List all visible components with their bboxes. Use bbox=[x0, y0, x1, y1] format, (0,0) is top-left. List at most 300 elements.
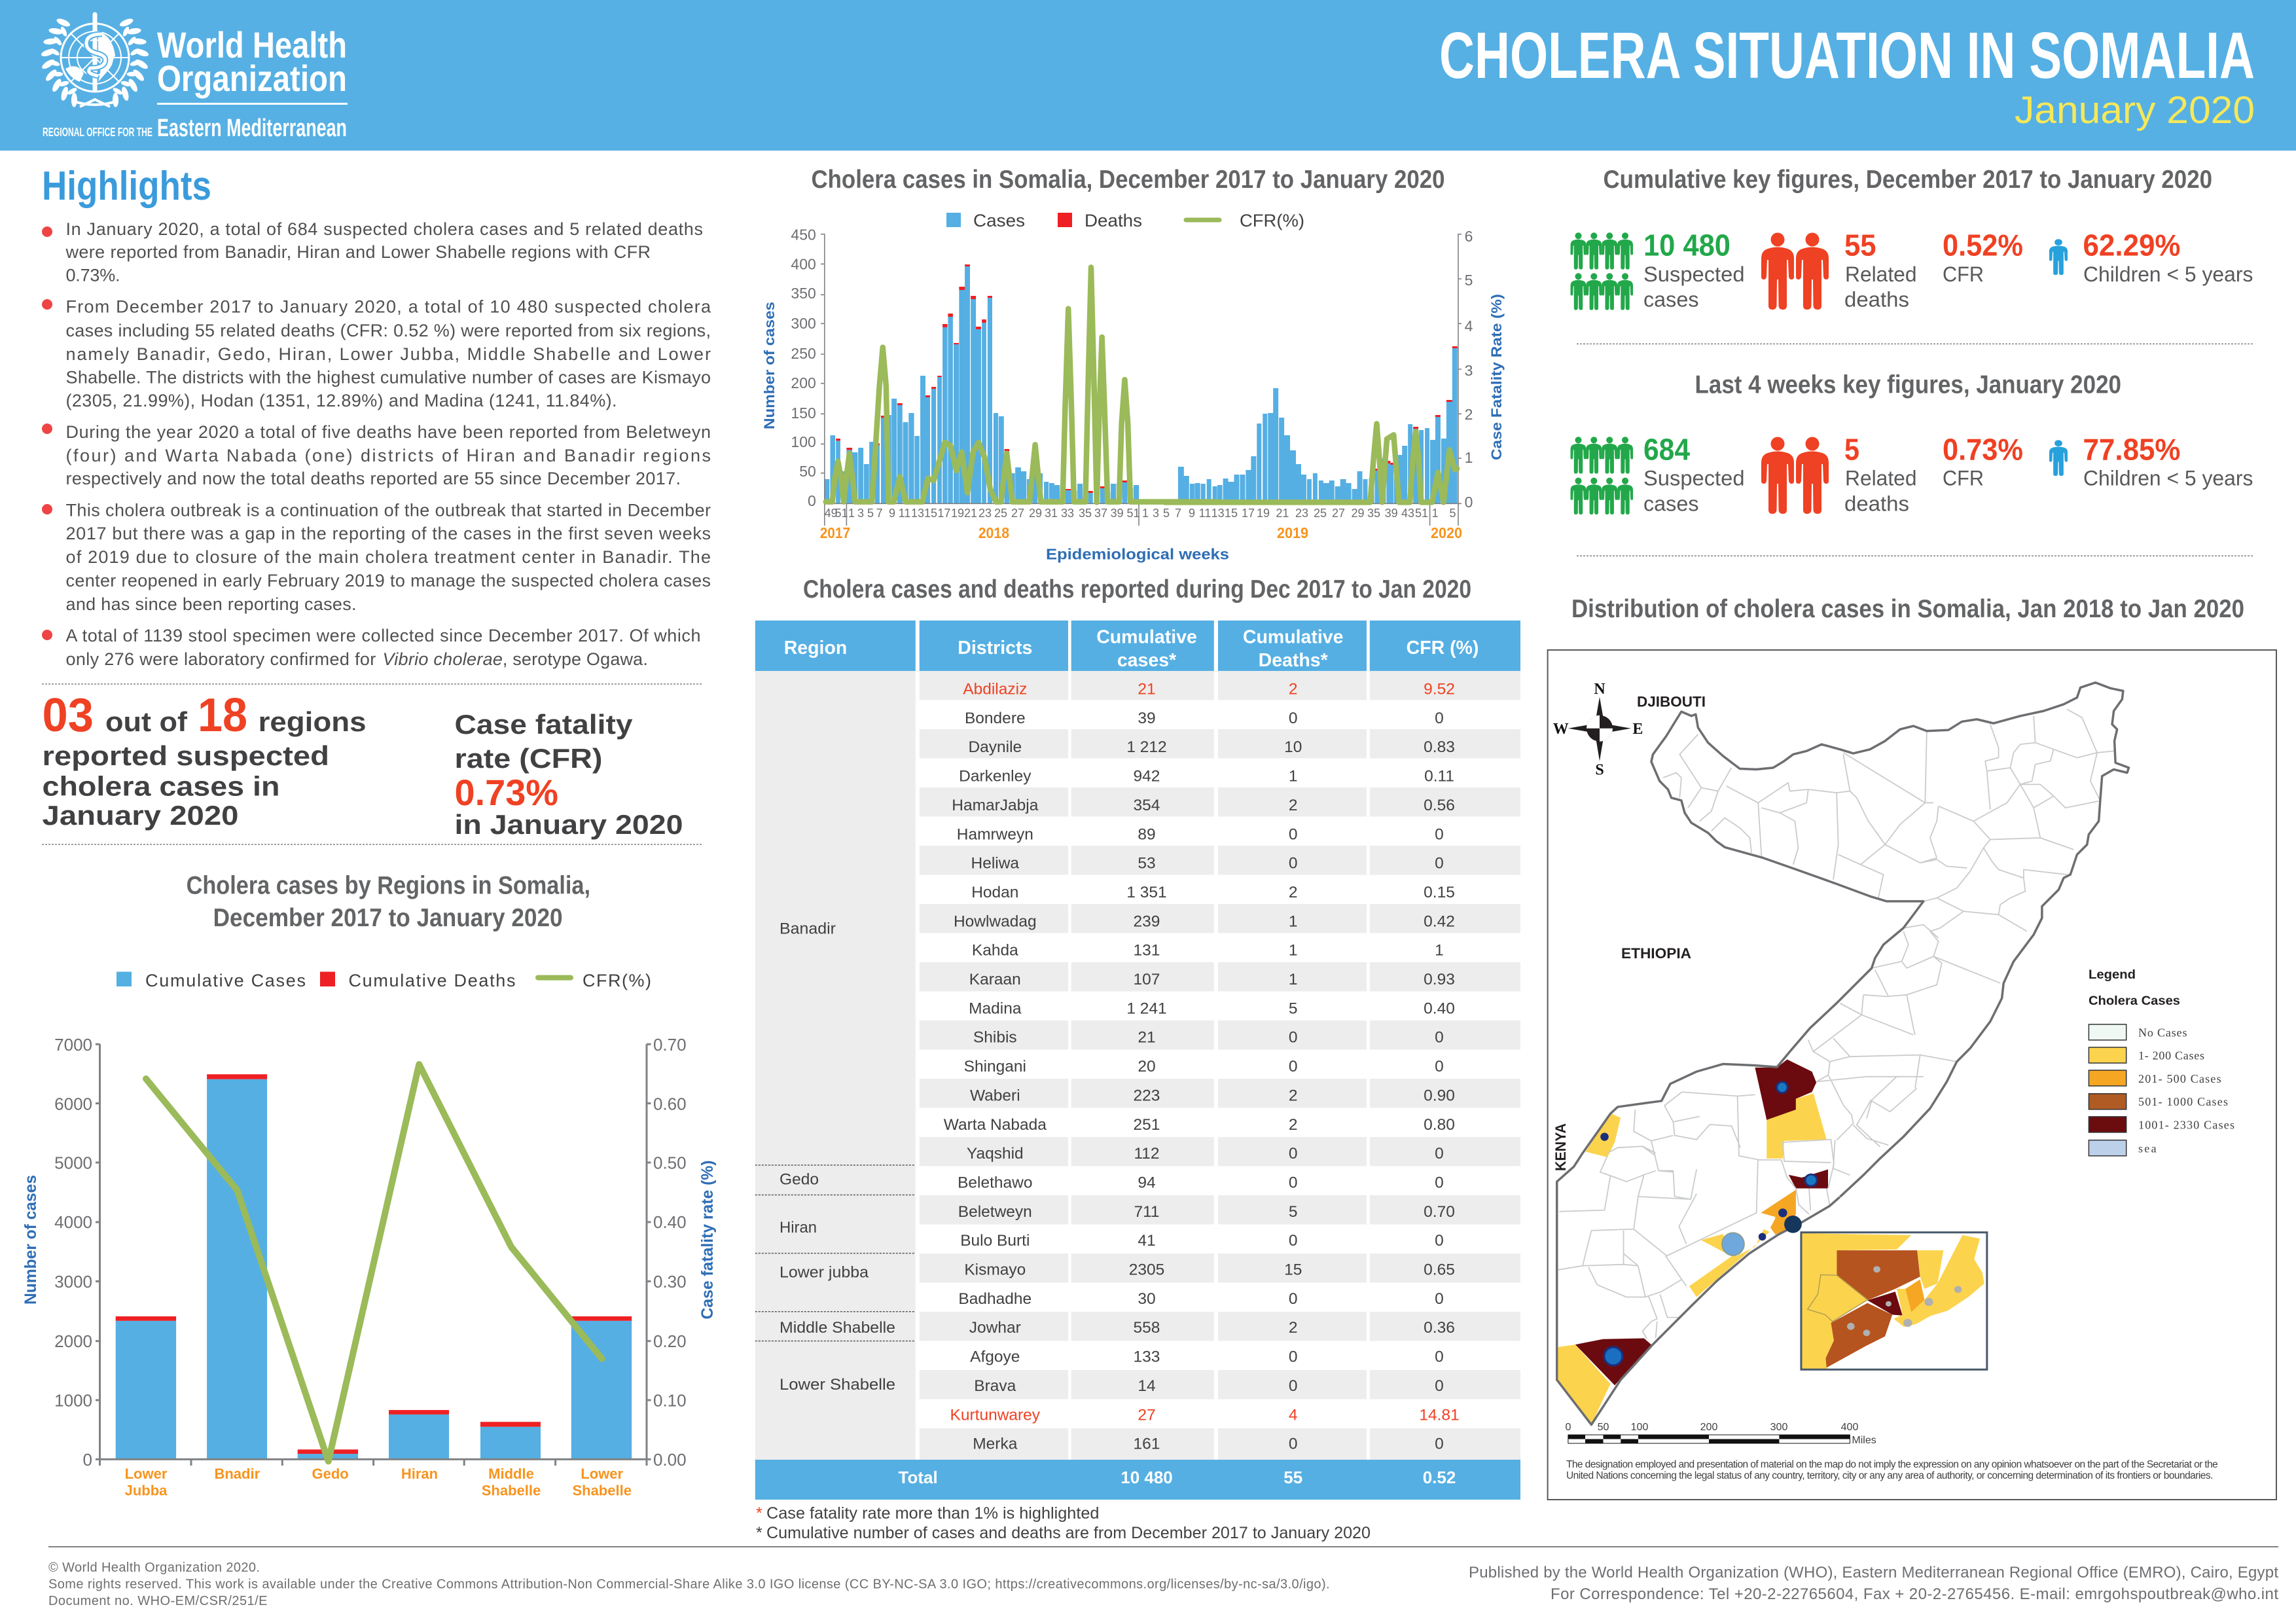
row: Kurtunwarey: 14.81 bbox=[1419, 1406, 1460, 1424]
callout: regions reporting: January 2020 bbox=[42, 800, 238, 831]
row: Badhadhe: Badhadhe bbox=[958, 1290, 1031, 1308]
row: Brava: Brava bbox=[974, 1377, 1016, 1395]
callout: case fatality rate: rate (CFR) bbox=[454, 743, 602, 774]
row: total: Total bbox=[899, 1468, 938, 1487]
footer: publisher bbox=[1469, 1564, 2278, 1603]
bullet 5: , serotype Ogawa. bbox=[503, 649, 648, 669]
week labels: 31 bbox=[1045, 507, 1058, 520]
axis title: case fatality rate: Case Fatality Rate (%) bbox=[1488, 294, 1505, 460]
row: Kismayo bbox=[964, 1261, 1455, 1279]
figure: suspected cases: cases bbox=[1643, 288, 1699, 312]
map legend: Cholera Cases bbox=[2089, 994, 2180, 1008]
line: weekly CFR bbox=[826, 267, 1457, 502]
row: Heliwa: 53 bbox=[1138, 855, 1156, 873]
row: Darkenley: 942 bbox=[1134, 768, 1160, 785]
WHO logo: REGIONAL OFFICE FOR THE bbox=[43, 126, 152, 139]
figure: related deaths: 5 bbox=[1844, 432, 1859, 466]
year labels: 2020 bbox=[1431, 524, 1462, 541]
row: Heliwa bbox=[971, 855, 1444, 873]
week labels: 27 bbox=[1011, 507, 1024, 520]
scale bar: 100 bbox=[1631, 1422, 1648, 1433]
row: Afgoye: 133 bbox=[1134, 1348, 1160, 1366]
figure: related deaths: deaths bbox=[1844, 492, 1909, 515]
axis title: epidemiological weeks: Epidemiological weeks bbox=[1046, 545, 1229, 562]
week labels: 39 bbox=[1385, 507, 1398, 520]
scale bar: 50 bbox=[1598, 1422, 1609, 1433]
map legend: 1001- 2330 Cases bbox=[2138, 1119, 2234, 1132]
row: Hamrweyn bbox=[957, 825, 1444, 843]
left axis labels bbox=[54, 1035, 92, 1470]
region labels: Shabelle bbox=[482, 1482, 541, 1498]
week labels: 51 bbox=[834, 507, 848, 520]
figure: suspected cases bbox=[1643, 432, 1745, 515]
scale bar: Miles bbox=[1852, 1435, 1876, 1446]
row: Abdilaziz: Abdilaziz bbox=[963, 681, 1027, 698]
map legend: 201- 500 Cases bbox=[2138, 1072, 2221, 1085]
table header: CFR (%) bbox=[1407, 638, 1479, 659]
row: Madina: 1 241 bbox=[1126, 1000, 1167, 1017]
right axis labels: 0.30 bbox=[653, 1272, 687, 1291]
right axis labels: 0.60 bbox=[653, 1094, 687, 1114]
chart legend: regions: Cumulative Deaths bbox=[348, 971, 516, 990]
bullet 5: A total of 1139 stool specimen were collected since December 2017. Of which bbox=[65, 626, 700, 645]
row: Shingani: 20 bbox=[1138, 1058, 1156, 1075]
figure: related deaths: Related bbox=[1845, 262, 1916, 286]
row: Hodan bbox=[971, 884, 1455, 901]
callout: regions reporting: 18 bbox=[198, 689, 247, 742]
row: Brava: 0 bbox=[1289, 1377, 1298, 1395]
figure: CFR: CFR bbox=[1943, 467, 1984, 490]
row: Badhadhe: 0 bbox=[1289, 1290, 1298, 1308]
bullet 3: During the year 2020 a total of five deaths have been reported from Beletweyn bbox=[65, 422, 711, 442]
right axis labels: 1 bbox=[1465, 449, 1473, 466]
row: Bondere bbox=[965, 710, 1444, 727]
year labels: 2018 bbox=[978, 524, 1009, 541]
week labels: 19 bbox=[1257, 507, 1270, 520]
left axis labels: 400 bbox=[791, 256, 816, 273]
row: Darkenley bbox=[959, 768, 1454, 785]
row: Heliwa: Heliwa bbox=[971, 855, 1019, 873]
left axis labels: 1000 bbox=[54, 1390, 92, 1410]
chart legend: weekly: Deaths bbox=[1085, 211, 1142, 230]
week labels: 25 bbox=[1314, 507, 1327, 520]
WHO logo: Eastern Mediterranean bbox=[157, 115, 347, 142]
week labels: 1 bbox=[1432, 507, 1439, 520]
figure: children under 5: 77.85% bbox=[2083, 432, 2181, 466]
figure: children under 5 bbox=[2083, 432, 2253, 490]
table header bbox=[755, 621, 1520, 671]
week labels: 51 bbox=[1415, 507, 1428, 520]
compass letters: W bbox=[1553, 721, 1569, 738]
row: Jowhar bbox=[969, 1319, 1455, 1337]
row: Afgoye bbox=[970, 1348, 1444, 1366]
row: Hamrweyn: 89 bbox=[1138, 825, 1156, 843]
left axis labels: 7000 bbox=[54, 1035, 92, 1055]
row: Hamrweyn: 0 bbox=[1435, 825, 1444, 843]
right axis labels: 0.70 bbox=[653, 1035, 687, 1055]
icon: child bbox=[2049, 440, 2068, 476]
row: Warta Nabada: Warta Nabada bbox=[944, 1116, 1047, 1134]
icon: WHO emblem bbox=[41, 14, 149, 107]
bar chart: weekly cases and deaths bbox=[761, 226, 1505, 562]
row: Warta Nabada bbox=[944, 1116, 1455, 1134]
chart legend: regions: CFR(%) bbox=[583, 971, 651, 990]
row: Shibis: 0 bbox=[1289, 1029, 1298, 1047]
week labels: 1 bbox=[1142, 507, 1149, 520]
week labels: 9 bbox=[1189, 507, 1195, 520]
left axis labels: 5000 bbox=[54, 1153, 92, 1173]
axes bbox=[821, 234, 1462, 526]
week labels: 33 bbox=[1061, 507, 1074, 520]
affected districts bbox=[1557, 1059, 1828, 1424]
bullet 1 bbox=[42, 219, 703, 285]
row: Shibis: 0 bbox=[1435, 1029, 1444, 1047]
bullet 4 bbox=[42, 501, 711, 614]
map: north and central Somalia districts bbox=[1651, 683, 2129, 1197]
region names: Banadir bbox=[780, 920, 836, 937]
week labels: 9 bbox=[889, 507, 895, 520]
icon: related deaths people bbox=[1761, 233, 1829, 310]
week labels: 13 bbox=[1211, 507, 1225, 520]
figure: CFR bbox=[1943, 228, 2023, 286]
week labels: 3 bbox=[1153, 507, 1159, 520]
left axis labels: 200 bbox=[791, 374, 816, 391]
row: Jowhar: Jowhar bbox=[969, 1319, 1021, 1337]
right axis labels: 0.20 bbox=[653, 1331, 687, 1351]
week labels bbox=[825, 507, 1456, 520]
row: Kurtunwarey: 4 bbox=[1289, 1406, 1298, 1424]
row: Daynile bbox=[968, 738, 1455, 756]
row stripes bbox=[920, 671, 1520, 1460]
icon: suspected cases people bbox=[1571, 232, 1633, 310]
year labels: 2017 bbox=[820, 524, 850, 541]
left axis labels bbox=[791, 226, 816, 509]
heading: regions chart: December 2017 to January 2020 bbox=[213, 904, 563, 932]
map disclaimer: The designation employed and presentation of material on the map do not imply the expression on any opinion whatsoever on the part of the Secretariat or the bbox=[1566, 1459, 2218, 1470]
scale bar bbox=[1566, 1422, 1876, 1446]
week labels: 11 bbox=[899, 507, 910, 520]
row: Darkenley: 1 bbox=[1289, 768, 1298, 785]
bullet 4: of 2019 due to closure of the main cholera treatment center in Banadir. The bbox=[65, 547, 711, 567]
figure: CFR bbox=[1943, 432, 2023, 490]
right axis labels bbox=[653, 1035, 687, 1470]
row: Abdilaziz: 2 bbox=[1289, 681, 1298, 698]
row: Shingani: 0 bbox=[1289, 1058, 1298, 1075]
chart legend: regions bbox=[117, 971, 651, 990]
table header: cases* bbox=[1117, 650, 1177, 671]
bullet 2 bbox=[42, 297, 711, 410]
bullet 3: respectively and now the total deaths reported are 55 since December 2017. bbox=[65, 469, 681, 488]
callout: case fatality rate: in January 2020 bbox=[454, 809, 683, 840]
row: Waberi: 2 bbox=[1289, 1087, 1298, 1104]
row: Waberi bbox=[970, 1087, 1455, 1104]
bullet 3 bbox=[42, 422, 711, 488]
row: Shingani bbox=[964, 1058, 1444, 1075]
panel: highlights text bbox=[42, 219, 711, 669]
row: Daynile: 0.83 bbox=[1424, 738, 1455, 756]
heading: cumulative key figures: Cumulative key figures, December 2017 to January 2020 bbox=[1604, 166, 2212, 194]
row: Beletweyn: 5 bbox=[1289, 1203, 1298, 1221]
map legend: sea bbox=[2138, 1142, 2157, 1155]
row: Belethawo: 0 bbox=[1435, 1174, 1444, 1191]
row: Howlwadag: Howlwadag bbox=[954, 912, 1037, 930]
inset map: Banadir bbox=[1801, 1233, 1987, 1369]
row: Warta Nabada: 251 bbox=[1134, 1116, 1160, 1134]
row: Merka: 0 bbox=[1435, 1435, 1444, 1453]
header band bbox=[0, 0, 2296, 151]
row: Kismayo: Kismayo bbox=[964, 1261, 1026, 1279]
right axis labels: 2 bbox=[1465, 406, 1473, 423]
panel: map of cholera distribution bbox=[1548, 650, 2276, 1500]
left axis labels: 6000 bbox=[54, 1094, 92, 1114]
row: Yaqshid: 0 bbox=[1435, 1145, 1444, 1163]
panel: cumulative key figures bbox=[1571, 228, 2253, 312]
row: total: 10 480 bbox=[1121, 1468, 1173, 1487]
figure: suspected cases: Suspected bbox=[1643, 262, 1745, 286]
region labels: Hiran bbox=[401, 1466, 438, 1482]
figure: suspected cases bbox=[1643, 228, 1745, 312]
region column background bbox=[755, 671, 916, 1460]
figure: related deaths: Related bbox=[1845, 467, 1916, 490]
row: Yaqshid: 112 bbox=[1134, 1145, 1160, 1163]
row: total bbox=[755, 1460, 1520, 1500]
row: Beletweyn: Beletweyn bbox=[958, 1203, 1032, 1221]
left axis labels: 150 bbox=[791, 405, 816, 422]
row: Bondere: 0 bbox=[1289, 710, 1298, 727]
row: Madina: 0.40 bbox=[1424, 1000, 1455, 1017]
heading: regions chart: Cholera cases by Regions in Somalia, bbox=[187, 872, 590, 899]
row: Hodan: 1 351 bbox=[1126, 884, 1167, 901]
bullet 4: center reopened in early February 2019 to manage the suspected cholera cases bbox=[65, 571, 711, 590]
left axis labels: 100 bbox=[791, 433, 816, 450]
row: Kurtunwarey: 27 bbox=[1138, 1406, 1156, 1424]
row: Karaan: 0.93 bbox=[1424, 971, 1455, 988]
region labels: Lower bbox=[125, 1466, 168, 1482]
week labels: 23 bbox=[978, 507, 992, 520]
table footnotes bbox=[756, 1504, 1371, 1542]
row: total: 55 bbox=[1283, 1468, 1302, 1487]
table: cases and deaths by district bbox=[755, 621, 1520, 1500]
bullet 4: and has since been reporting cases. bbox=[65, 594, 356, 614]
row: Howlwadag: 0.42 bbox=[1424, 912, 1455, 930]
table header: Cumulative bbox=[1243, 627, 1344, 648]
bars 2019-2020 bbox=[1178, 346, 1458, 503]
row: Hamrweyn: 0 bbox=[1289, 825, 1298, 843]
map labels: countries: DJIBOUTI bbox=[1637, 693, 1706, 710]
row: HamarJabja: 2 bbox=[1289, 797, 1298, 814]
week labels: 35 bbox=[1367, 507, 1380, 520]
compass letters: N bbox=[1594, 681, 1605, 698]
region names: Hiran bbox=[780, 1219, 817, 1236]
right axis labels: 0 bbox=[1465, 494, 1473, 511]
right axis labels: 0.40 bbox=[653, 1212, 687, 1232]
row: Beletweyn bbox=[958, 1203, 1455, 1221]
region names bbox=[780, 920, 895, 1394]
row: Belethawo: 94 bbox=[1138, 1174, 1156, 1191]
right axis labels: 0.10 bbox=[653, 1390, 687, 1410]
footer: copyright: Some rights reserved. This work is available under the Creative Commons Attribution-Non Commercial-Share Alike 3.0 IGO license (CC BY-NC-SA 3.0 IGO; https://creativecommons.org/licenses/by-nc-sa/3.0/igo). bbox=[48, 1578, 1330, 1592]
left axis labels: 350 bbox=[791, 285, 816, 302]
WHO logo: World Health bbox=[157, 24, 347, 65]
footer: publisher: Published by the World Health Organization (WHO), Eastern Mediterranean Regional Office (EMRO), Cairo, Egypt bbox=[1469, 1564, 2278, 1581]
row: Abdilaziz: 21 bbox=[1138, 681, 1156, 698]
callout: regions reporting: regions bbox=[259, 706, 367, 737]
row: Afgoye: 0 bbox=[1289, 1348, 1298, 1366]
map legend: Legend bbox=[2089, 968, 2136, 982]
week labels: 17 bbox=[937, 507, 950, 520]
figure: related deaths bbox=[1844, 228, 1916, 312]
row: Shibis bbox=[973, 1029, 1444, 1047]
figure: related deaths: deaths bbox=[1844, 288, 1909, 312]
WHO logo: Organization bbox=[157, 58, 347, 99]
left axis labels: 0 bbox=[808, 492, 816, 509]
week labels: 13 bbox=[911, 507, 924, 520]
row: Waberi: Waberi bbox=[970, 1087, 1020, 1104]
figure: children under 5 bbox=[2083, 228, 2253, 286]
row: Abdilaziz: 9.52 bbox=[1424, 681, 1455, 698]
week labels: 51 bbox=[1126, 507, 1140, 520]
week labels: 29 bbox=[1351, 507, 1365, 520]
bullet 5: only 276 were laboratory confirmed for bbox=[65, 649, 376, 669]
bars 2017-2019 first half bbox=[825, 264, 1139, 503]
bar chart: cases by region bbox=[22, 1035, 717, 1498]
row: Kismayo: 2305 bbox=[1129, 1261, 1164, 1279]
bullet 2: (2305, 21.99%), Hodan (1351, 12.89%) and Madina (1241, 11.84%). bbox=[65, 391, 617, 410]
compass letters bbox=[1553, 681, 1643, 779]
row: Waberi: 0.90 bbox=[1424, 1087, 1455, 1104]
week labels: 49 bbox=[825, 507, 838, 520]
WHO logo bbox=[41, 14, 348, 142]
row: Jowhar: 0.36 bbox=[1424, 1319, 1455, 1337]
week labels: 5 bbox=[1449, 507, 1456, 520]
heading: weekly chart: Cholera cases in Somalia, December 2017 to January 2020 bbox=[812, 166, 1445, 194]
table footnotes: * bbox=[756, 1504, 762, 1523]
icon: suspected cases people bbox=[1571, 437, 1633, 514]
region labels: Lower bbox=[581, 1466, 624, 1482]
region names: Gedo bbox=[780, 1171, 819, 1189]
icon: compass bbox=[1568, 697, 1631, 761]
scale bar: 0 bbox=[1566, 1422, 1571, 1433]
region labels bbox=[125, 1466, 632, 1498]
callout: case fatality rate bbox=[454, 709, 683, 840]
row: Bulo Burti: 41 bbox=[1138, 1232, 1156, 1250]
row: Merka: Merka bbox=[973, 1435, 1018, 1453]
year labels bbox=[820, 524, 1462, 541]
row: Yaqshid: Yaqshid bbox=[967, 1145, 1024, 1163]
week labels: 29 bbox=[1029, 507, 1042, 520]
row: Kurtunwarey: Kurtunwarey bbox=[950, 1406, 1041, 1424]
week labels: 27 bbox=[1332, 507, 1345, 520]
week labels: 15 bbox=[924, 507, 937, 520]
row: Kahda: 131 bbox=[1134, 942, 1160, 960]
map legend: 501- 1000 Cases bbox=[2138, 1095, 2228, 1108]
row: Hodan: 2 bbox=[1289, 884, 1298, 901]
row: Darkenley: Darkenley bbox=[959, 768, 1031, 785]
footer: copyright: © World Health Organization 2020. bbox=[48, 1561, 260, 1575]
row: Howlwadag: 239 bbox=[1134, 912, 1160, 930]
week labels: 5 bbox=[1163, 507, 1170, 520]
row: Kismayo: 15 bbox=[1284, 1261, 1302, 1279]
scale bar: 400 bbox=[1841, 1422, 1858, 1433]
row: Howlwadag: 1 bbox=[1289, 912, 1298, 930]
row: Heliwa: 0 bbox=[1435, 855, 1444, 873]
week labels: 17 bbox=[1242, 507, 1255, 520]
row: Bulo Burti bbox=[960, 1232, 1444, 1250]
week labels: 7 bbox=[1175, 507, 1181, 520]
row: total: 0.52 bbox=[1423, 1468, 1456, 1487]
row: Yaqshid: 0 bbox=[1289, 1145, 1298, 1163]
right axis labels: 0.00 bbox=[653, 1450, 687, 1470]
right axis labels: 5 bbox=[1465, 272, 1473, 289]
region names: Middle Shabelle bbox=[780, 1319, 895, 1337]
bullet 1: In January 2020, a total of 684 suspected cholera cases and 5 related deaths bbox=[65, 219, 703, 239]
bullet 3: (four) and Warta Nabada (one) districts of Hiran and Banadir regions bbox=[65, 446, 711, 465]
table footnotes: * bbox=[756, 1524, 762, 1542]
row: Bondere: Bondere bbox=[965, 710, 1026, 727]
week labels: 3 bbox=[857, 507, 864, 520]
row: Daynile: 10 bbox=[1284, 738, 1302, 756]
row: Shingani: 0 bbox=[1435, 1058, 1444, 1075]
row: Madina: 5 bbox=[1289, 1000, 1298, 1017]
figure: related deaths bbox=[1844, 432, 1916, 515]
row: Yaqshid bbox=[967, 1145, 1444, 1163]
callout: regions reporting bbox=[42, 689, 367, 831]
row: Waberi: 223 bbox=[1134, 1087, 1160, 1104]
heading: Highlights: Highlights bbox=[42, 164, 211, 209]
row: Belethawo: 0 bbox=[1289, 1174, 1298, 1191]
compass letters: S bbox=[1595, 762, 1604, 779]
row: Kurtunwarey bbox=[950, 1406, 1460, 1424]
row: HamarJabja: HamarJabja bbox=[952, 797, 1039, 814]
week labels: 1 bbox=[848, 507, 855, 520]
callout: regions reporting: reported suspected bbox=[42, 740, 329, 771]
week labels: 21 bbox=[1276, 507, 1289, 520]
row: Brava: 0 bbox=[1435, 1377, 1444, 1395]
row: Karaan bbox=[969, 971, 1455, 988]
callout: regions reporting: out of bbox=[105, 706, 188, 737]
callout: case fatality rate: 0.73% bbox=[454, 772, 558, 813]
callout: regions reporting: 03 bbox=[42, 689, 94, 742]
icon: related deaths people bbox=[1761, 437, 1829, 514]
row: Badhadhe: 30 bbox=[1138, 1290, 1156, 1308]
map disclaimer bbox=[1566, 1459, 2218, 1481]
subtitle: month: January 2020 bbox=[2015, 89, 2255, 132]
row: Warta Nabada: 0.80 bbox=[1424, 1116, 1455, 1134]
left axis labels: 300 bbox=[791, 315, 816, 332]
axis title: number of cases: Number of cases bbox=[761, 302, 778, 429]
row: Kahda: Kahda bbox=[972, 942, 1018, 960]
map labels: countries: KENYA bbox=[1552, 1123, 1569, 1171]
map labels: countries: ETHIOPIA bbox=[1621, 945, 1691, 962]
figure: suspected cases: Suspected bbox=[1643, 467, 1745, 490]
bullet 4: This cholera outbreak is a continuation of the outbreak that started in December bbox=[65, 501, 711, 520]
right axis labels bbox=[1465, 228, 1473, 511]
week labels: 39 bbox=[1111, 507, 1124, 520]
bullet 5 bbox=[42, 626, 700, 669]
week labels: 5 bbox=[867, 507, 874, 520]
row: HamarJabja: 0.56 bbox=[1424, 797, 1455, 814]
left axis labels: 250 bbox=[791, 345, 816, 362]
week labels: 43 bbox=[1401, 507, 1414, 520]
week labels: 15 bbox=[1225, 507, 1238, 520]
region labels: Shabelle bbox=[572, 1482, 632, 1498]
row: Bulo Burti: 0 bbox=[1435, 1232, 1444, 1250]
chart legend: weekly: Cases bbox=[973, 211, 1025, 230]
region names: Lower Shabelle bbox=[780, 1376, 895, 1394]
region labels: Bnadir bbox=[214, 1466, 260, 1482]
table header: Deaths* bbox=[1259, 650, 1329, 671]
row: Afgoye: 0 bbox=[1435, 1348, 1444, 1366]
